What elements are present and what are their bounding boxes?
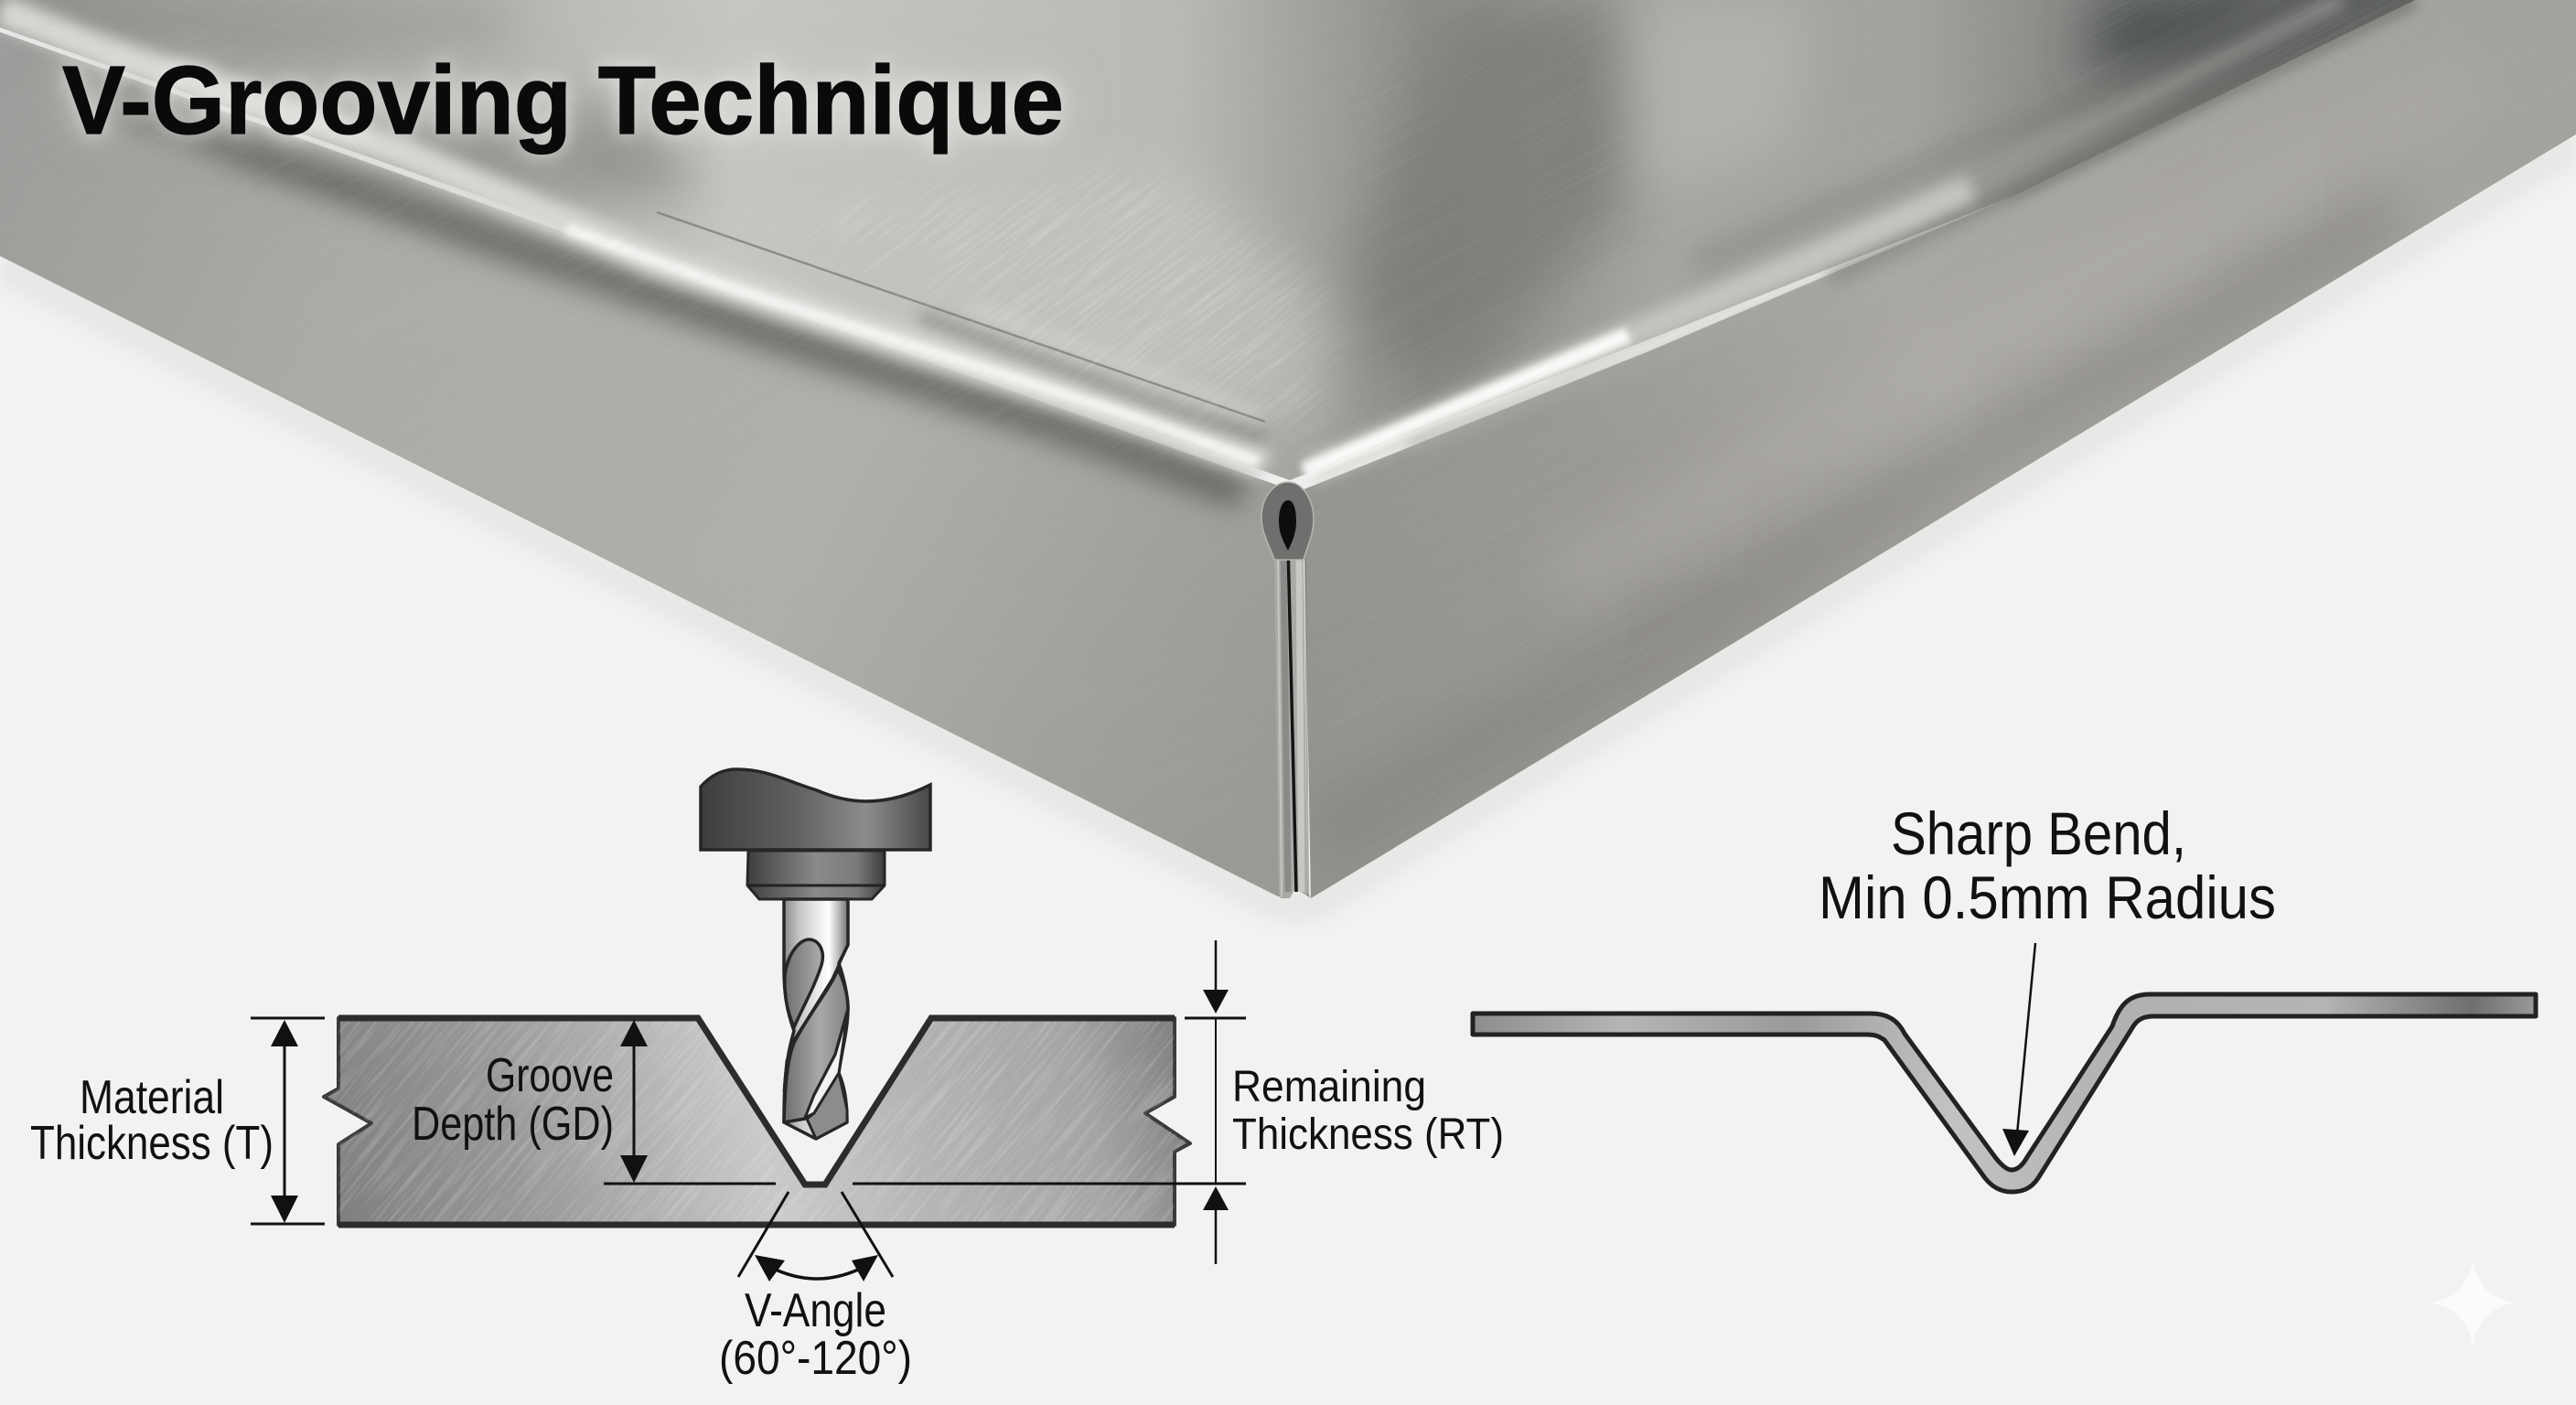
teardrop: [1261, 482, 1314, 560]
router bit cutter: [701, 769, 930, 1139]
v-angle dimension: [738, 1192, 893, 1282]
sheet shadow: [0, 144, 2576, 906]
plate brushed hatch: [750, 1120, 751, 1121]
corner relief notch: [1261, 482, 1314, 898]
diagram: bent sheet profile: [1473, 799, 2536, 1192]
light brushed patch near corner: [1006, 319, 1007, 321]
left side face: [0, 32, 1281, 901]
title: V-Grooving Technique: [62, 47, 1064, 155]
groove depth dimension: [604, 1020, 1246, 1184]
seam gap: [1288, 544, 1296, 892]
watermark sparkle: [2431, 1260, 2515, 1346]
material thickness label: Thickness (T): [30, 1117, 274, 1170]
plate thick edges: [338, 1018, 1175, 1225]
remaining thickness label: Remaining: [1232, 1063, 1426, 1111]
teardrop hole: [1279, 500, 1296, 551]
seam strip: [1274, 553, 1311, 898]
sharp bend label: [1819, 799, 2276, 931]
grooved plate: [324, 1018, 1190, 1225]
cutting edge highlight: [805, 1011, 848, 1118]
bit collar: [747, 851, 885, 899]
groove depth label: Depth (GD): [412, 1098, 614, 1151]
lower flute: [807, 1073, 847, 1139]
plane fold line: [657, 212, 1265, 422]
material thickness label: Material: [80, 1071, 224, 1124]
upper flute: [785, 939, 822, 1027]
stainless steel sheet corner: [0, 0, 2576, 901]
remaining thickness label: Thickness (RT): [1232, 1110, 1504, 1159]
bent strip: [1473, 994, 2536, 1192]
v-angle label: [719, 1284, 912, 1385]
groove depth label: Groove: [486, 1049, 614, 1102]
sharp bend leader arrow: [2002, 943, 2035, 1156]
remaining thickness dimension: [1185, 940, 1246, 1264]
diagram: V-groove cross section: [30, 769, 1504, 1385]
material thickness label: [30, 1071, 274, 1170]
v-angle label: (60°-120°): [719, 1332, 912, 1385]
right bend ridge: [1304, 0, 2415, 471]
bit head: [701, 769, 930, 850]
remaining thickness label: [1232, 1063, 1504, 1159]
bit body silhouette: [784, 899, 848, 1139]
upper edge line: [784, 945, 848, 1091]
sharp bend label: Sharp Bend,: [1891, 799, 2186, 867]
left bend ridge: [0, 10, 1267, 494]
groove depth label: [412, 1049, 614, 1151]
material thickness dimension: [251, 1018, 325, 1224]
right side face: [1304, 0, 2576, 901]
brushed metal texture: [1281, 457, 1282, 458]
top plane: [0, 0, 2576, 494]
main flute: [784, 970, 848, 1122]
v-angle label: V-Angle: [745, 1284, 886, 1337]
sharp bend label: Min 0.5mm Radius: [1819, 863, 2276, 931]
